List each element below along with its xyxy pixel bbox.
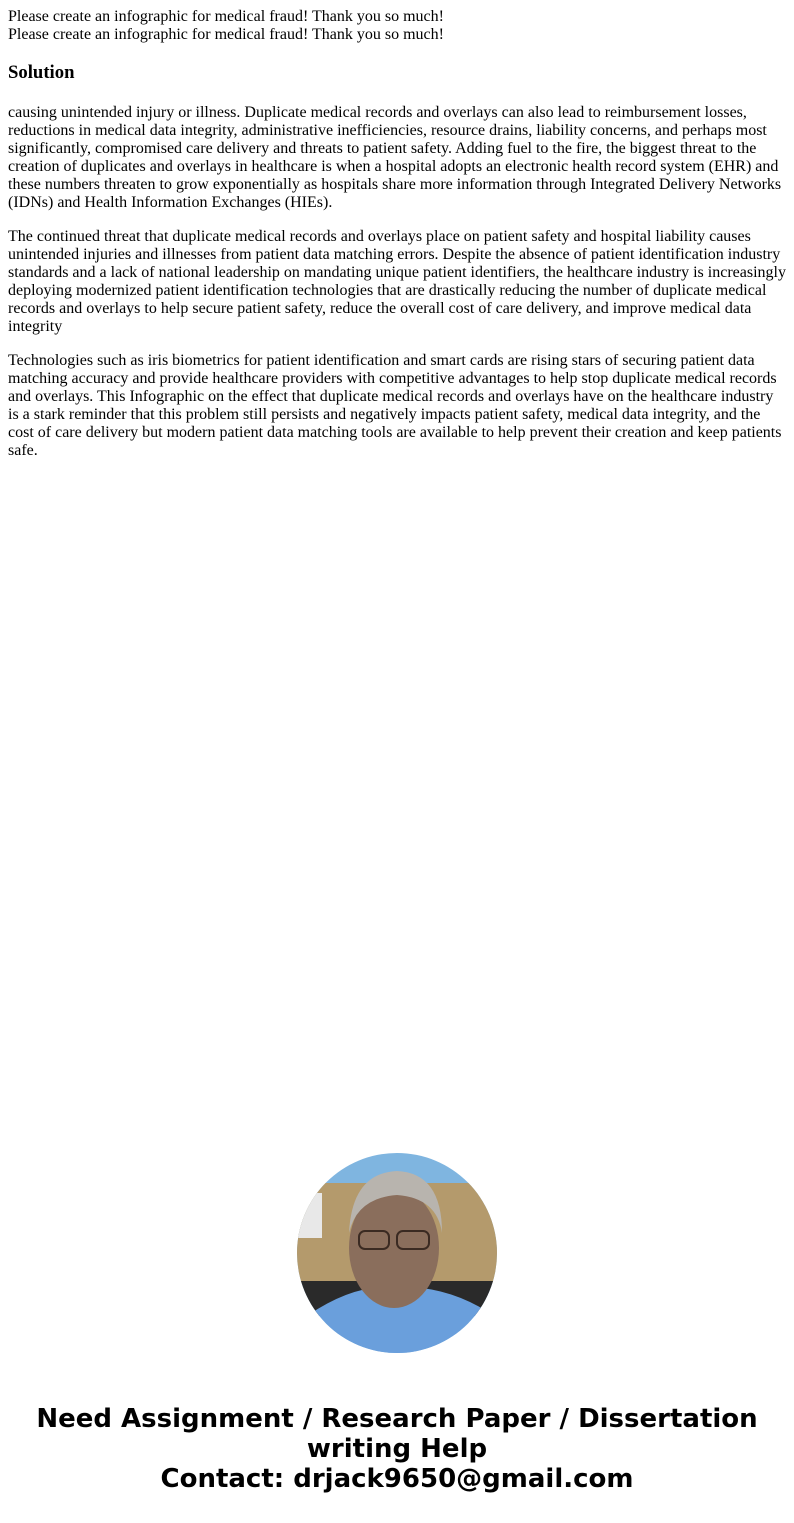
paragraph 1: causing unintended injury or illness. Duplicate medical records and overlays can also lead to reimbursement losses, reductions in medical data integrity, administrative inefficiencies, resource drains, liability concerns, and perhaps most significantly, compromised care delivery and threats to patient safety. Adding fuel to the fire, the biggest threat to the creation of duplicates and overlays in healthcare is when a hospital adopts an electronic health record system (EHR) and these numbers threaten to grow exponentially as hospitals share more information through Integrated Delivery Networks (IDNs) and Health Information Exchanges (HIEs). — [8, 104, 781, 211]
text content — [8, 8, 786, 459]
paragraph 2: The continued threat that duplicate medical records and overlays place on patient safety and hospital liability causes unintended injuries and illnesses from patient data matching errors. Despite the absence of patient identification industry standards and a lack of national leadership on mandating unique patient identifiers, the healthcare industry is increasingly deploying modernized patient identification technologies that are drastically reducing the number of duplicate medical records and overlays to help secure patient safety, reduce the overall cost of care delivery, and improve medical data integrity — [8, 228, 786, 335]
call to action: Need Assignment / Research Paper / Dissertation — [36, 1404, 758, 1434]
call to action — [36, 1404, 758, 1494]
call to action: writing Help — [307, 1434, 487, 1464]
photo: portrait circle — [297, 1153, 497, 1353]
paragraph 3: Technologies such as iris biometrics for patient identification and smart cards are rising stars of securing patient data matching accuracy and provide healthcare providers with competitive advantages to help stop duplicate medical records and overlays. This Infographic on the effect that duplicate medical records and overlays have on the healthcare industry is a stark reminder that this problem still persists and negatively impacts patient safety, medical data integrity, and the cost of care delivery but modern patient data matching tools are available to help prevent their creation and keep patients safe. — [8, 352, 781, 459]
heading: Solution: Solution — [8, 62, 74, 83]
question: Please create an infographic for medical fraud! Thank you so much! — [8, 8, 444, 25]
question: Please create an infographic for medical fraud! Thank you so much! — [8, 26, 444, 43]
call to action: Contact: drjack9650@gmail.com — [160, 1464, 634, 1494]
question — [8, 8, 444, 43]
